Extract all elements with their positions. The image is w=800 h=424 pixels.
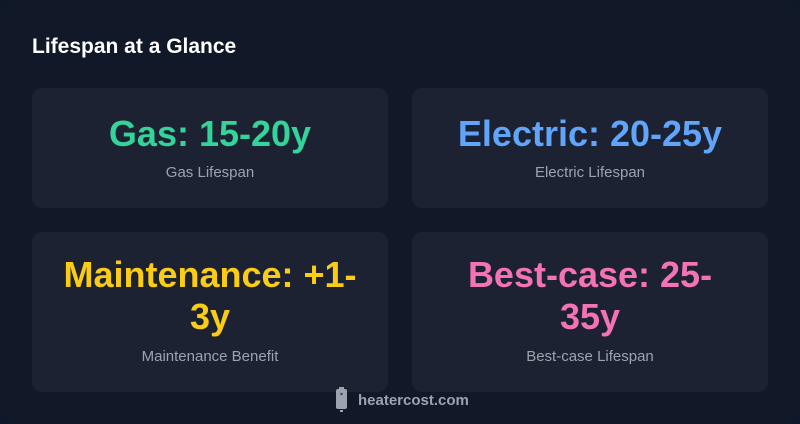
card: maintenance: Maintenance Benefit	[142, 348, 278, 365]
card: maintenance: Maintenance: +1-	[63, 254, 357, 295]
icon: water heater	[336, 387, 347, 412]
card: gas: Gas: 15-20y	[109, 113, 311, 154]
card: best-case: Best-case Lifespan	[526, 348, 654, 365]
card: gas	[32, 88, 388, 208]
title: Lifespan at a Glance	[32, 35, 236, 58]
card: electric	[412, 88, 768, 208]
footer brand	[336, 387, 469, 412]
card: gas: Gas Lifespan	[166, 164, 254, 181]
card: best-case: 35y	[560, 296, 620, 337]
card: maintenance	[32, 232, 388, 392]
card: electric: Electric: 20-25y	[458, 113, 722, 154]
card: best-case: Best-case: 25-	[468, 254, 712, 295]
card: maintenance: 3y	[190, 296, 230, 337]
card: electric: Electric Lifespan	[535, 164, 645, 181]
footer text: heatercost.com	[358, 392, 469, 409]
card: best-case	[412, 232, 768, 392]
